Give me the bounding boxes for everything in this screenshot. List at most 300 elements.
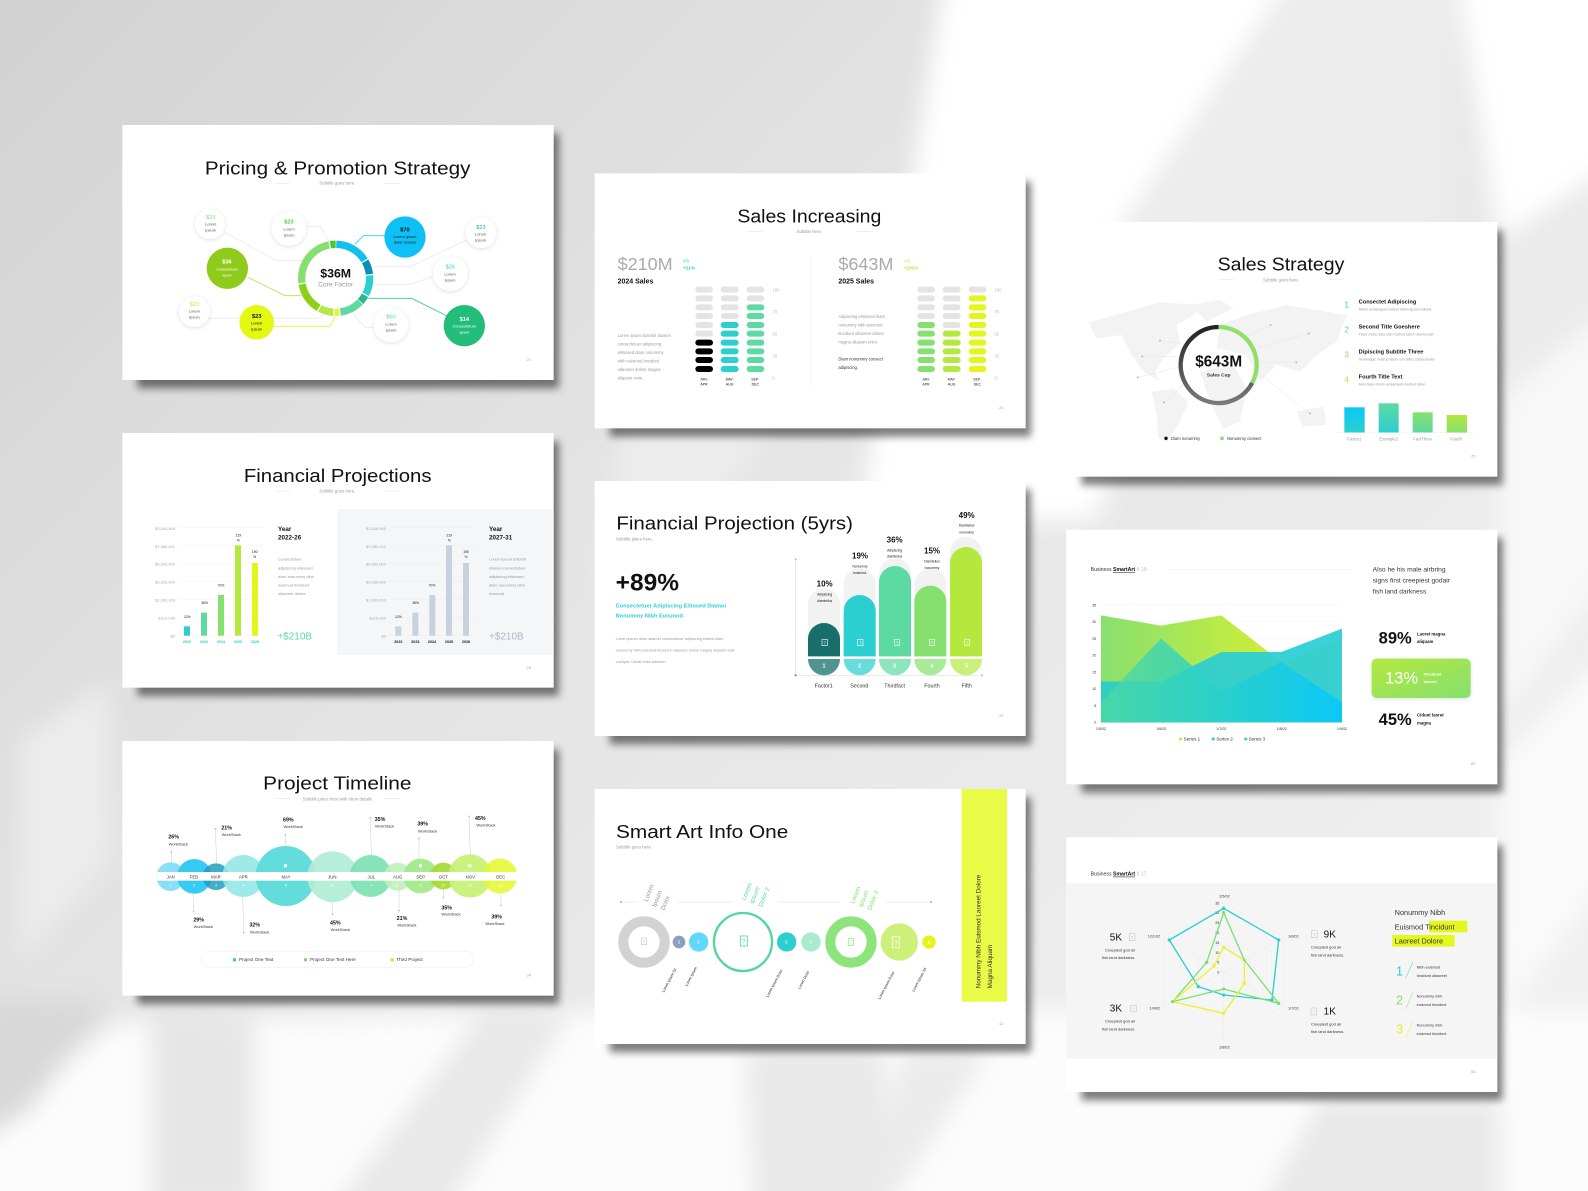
capsule bar: Factor1 10%: 10% xyxy=(817,580,833,589)
radar chart xyxy=(1148,895,1299,1049)
timeline bubbles xyxy=(156,846,517,906)
panel: Project Timeline slide xyxy=(122,741,559,1004)
page number: 29 xyxy=(999,713,1004,718)
step 9: 9 xyxy=(928,940,931,945)
heading: 5 year projection title: Financial Projection (5yrs) xyxy=(616,513,853,534)
heading: sales increasing title: Sales Increasing xyxy=(737,205,881,226)
text block: 2024 description: elitsosed diam nonummy xyxy=(618,350,665,355)
core value: $36M xyxy=(320,267,351,281)
rotated captions: Lorem Ipsum Dolor xyxy=(765,968,784,998)
white node: left bottom: Ipsum xyxy=(189,314,200,319)
stat: 2024 sales: 2024 Sales xyxy=(618,279,654,286)
rotated label 2 xyxy=(741,882,772,908)
white node: bottom right xyxy=(374,308,408,342)
bar chart: 2022-26: 219 xyxy=(236,533,241,537)
text block: 2024 description: utlaoreet dolore magna xyxy=(618,367,661,372)
key item 1: tincidunt utlaoreet xyxy=(1417,974,1448,978)
step 3: 3 xyxy=(697,940,700,945)
capsule bar: Thirdfact 36%: Thirdfact xyxy=(884,684,906,690)
step 5: 5 xyxy=(785,940,788,945)
colored node: $36: apum xyxy=(222,274,232,278)
pill chart: 2024: 0 xyxy=(772,376,775,381)
rotated label 3 xyxy=(849,885,881,911)
connector lines xyxy=(208,227,467,327)
stat: 45%: magna xyxy=(1417,721,1432,726)
capsule bar: Fifth 49% xyxy=(950,511,982,690)
heading: pricing title: Pricing & Promotion Strategy xyxy=(205,157,471,178)
leader lines and dots xyxy=(170,815,502,933)
text block: year 2022-26: diam nonummy nibh xyxy=(278,574,314,579)
bar chart: 2027-31: 2025 xyxy=(445,640,453,644)
month labels: OCT xyxy=(439,874,448,879)
area chart: 1/6/02 xyxy=(1156,727,1166,731)
page number: 24 xyxy=(999,405,1004,410)
white node: right top: Ipsum xyxy=(475,237,487,242)
capsule bar: Fifth 49%: Diamtellus xyxy=(959,524,975,528)
radar chart: 1/5/02 xyxy=(1219,895,1230,899)
panel: Sales Strategy slide xyxy=(1066,222,1503,485)
bar chart: 2027-31: 12% xyxy=(395,615,402,619)
radar chart: 30 xyxy=(1215,911,1219,915)
panel: Business SmartArt 19 slide xyxy=(1066,530,1503,793)
core label: Core Factor xyxy=(318,282,354,289)
white node: left top: Lorem xyxy=(205,222,217,227)
colored node: $23 yellow: Lorem xyxy=(251,321,263,326)
pill chart: 2025: JAN- xyxy=(922,377,930,381)
area chart: Series 2 xyxy=(1216,736,1233,741)
percent callouts: WorkStack xyxy=(375,824,394,829)
map connectors xyxy=(1137,324,1311,414)
percent callouts: WorkStack xyxy=(441,912,461,917)
text block: 2025 description: magna aliquam enim. xyxy=(838,340,878,345)
page number: 25 xyxy=(1471,453,1476,458)
gauge value: $643M xyxy=(1195,353,1242,370)
step 9 xyxy=(922,935,936,949)
list item 2 xyxy=(1344,324,1435,337)
stat: 3K: 3K xyxy=(1110,1004,1122,1015)
subtitle: Subtitle goes here. xyxy=(319,181,355,186)
big stat: +89% xyxy=(616,569,679,596)
center divider xyxy=(809,257,811,387)
bar chart: 2027-31: % xyxy=(448,538,451,542)
bar chart: 2027-31 xyxy=(366,526,475,644)
bar chart: 2022-26: 2026 xyxy=(251,640,259,644)
key item 3: 3 xyxy=(1396,1023,1403,1037)
bar chart: 2027-31: % xyxy=(465,555,468,559)
pill chart: 2024: 100 xyxy=(772,287,780,292)
percent callouts: WorkStack xyxy=(222,832,241,837)
panel: Financial Projection 5yrs slide xyxy=(595,481,1031,744)
body text: volutpat. Utwisi enim admnim. xyxy=(616,660,667,664)
stat: 9K: ? xyxy=(1313,932,1316,937)
rotated captions: Lorem Ipsum Sit xyxy=(661,968,677,993)
area chart: 1/8/02 xyxy=(1277,727,1287,731)
month labels: MAY xyxy=(281,874,291,879)
step 8: ? xyxy=(894,938,898,947)
stat: 45% xyxy=(1379,710,1444,729)
stat: 89%: Laoret magna xyxy=(1417,631,1446,636)
page number: 60 xyxy=(1471,761,1476,766)
month numbers: 5 xyxy=(285,883,288,888)
pill chart: 2025: 0 xyxy=(994,376,997,381)
pill chart: 2025: MAY- xyxy=(948,377,956,381)
subtitle: Subtitle goes here. xyxy=(1263,277,1299,282)
capsule bar: Second 19%: euismod. xyxy=(853,571,867,575)
rotated captions xyxy=(661,966,927,1000)
text block: 2025 description: Adipiscing elitsosed diam xyxy=(838,314,886,319)
page number: 34 xyxy=(527,973,532,978)
radar chart: 25 xyxy=(1215,921,1219,925)
capsule bar: Second 19% xyxy=(844,552,876,690)
white node: left bottom xyxy=(179,296,210,327)
panel: Smart Art Info One slide xyxy=(595,789,1031,1052)
panel: Business SmartArt 17 slide xyxy=(1066,837,1503,1100)
ring gauge xyxy=(1181,327,1257,403)
bar chart: 2027-31: 2022 xyxy=(394,640,402,644)
text block: 2025 description xyxy=(838,314,886,370)
arrow line xyxy=(620,901,932,903)
white node: top center: Lorem xyxy=(283,227,295,232)
capsule bar: Second 19%: Nonummy xyxy=(852,565,868,569)
stat: 2024 sales: VS xyxy=(683,258,689,263)
rotated captions: Lorem Ipsum xyxy=(684,966,698,987)
highlighted heading xyxy=(1392,908,1467,947)
percent callouts: 69% xyxy=(283,817,294,823)
stat: 1K: fish land darkness. xyxy=(1311,1029,1344,1034)
panel: Sales Increasing slide xyxy=(595,173,1031,437)
pill chart: 2024: MAY- xyxy=(726,377,734,381)
bar chart: 2022-26: 190 xyxy=(252,550,258,554)
capsule bar: Thirdfact 36%: ? xyxy=(896,640,899,645)
month numbers: 6 xyxy=(331,883,334,888)
rotated label 1 xyxy=(643,883,672,911)
world map xyxy=(1088,300,1347,442)
chart axes xyxy=(794,558,983,676)
pill chart: 2025: AUG xyxy=(948,382,956,386)
text block: 2024 description: nibh euismod tincidunt xyxy=(618,358,660,363)
map legend: Diam nonummy xyxy=(1171,436,1201,441)
capsule bar: Second 19%: 2 xyxy=(858,663,861,669)
month labels: JAN xyxy=(167,874,175,879)
list item 4: 4 xyxy=(1344,374,1349,384)
step 7 ring xyxy=(830,921,872,963)
key item 2: 2 xyxy=(1396,994,1403,1008)
stat: 3K: ? xyxy=(1132,1006,1135,1011)
colored node: $70 xyxy=(384,216,426,258)
stat card: 13%: 13% xyxy=(1385,669,1418,688)
teal highlight text: Nonummy Nibh Euismod xyxy=(616,614,683,620)
capsule bar: Factor1 10%: Factor1 xyxy=(815,684,833,690)
percent callouts: 32% xyxy=(249,922,260,928)
heading: business smartart 19: Business SmartArt # 19 xyxy=(1091,567,1147,573)
radar chart: 1/9/02 xyxy=(1150,1006,1160,1010)
bar chart: 2022-26: $5,093,009 xyxy=(155,562,176,567)
body text: Lorem ipsum dolor sitamet consectetuer adipiscing elitsed diam xyxy=(616,637,723,641)
percent callouts xyxy=(168,816,505,934)
text block: 2025 description: Diam nonummy consect xyxy=(838,356,884,361)
pill chart: 2025: 100 xyxy=(994,287,1002,292)
pill chart: 2025 xyxy=(917,287,1002,386)
month labels: MAR xyxy=(211,874,221,879)
capsule bar: Fourth 15%: 4 xyxy=(931,663,934,669)
radar chart: 0 xyxy=(1217,971,1219,975)
radar chart: 1/7/02 xyxy=(1288,1006,1299,1010)
area chart: 1/9/02 xyxy=(1337,727,1347,731)
month numbers: 3 xyxy=(215,883,218,888)
stat: 2025 sales: 2025 Sales xyxy=(838,279,874,286)
map legend: Nonummy consect xyxy=(1227,436,1262,441)
stat: 2025 sales: +200% xyxy=(904,265,919,270)
area chart: 30 xyxy=(1092,620,1096,624)
month numbers: 9 xyxy=(420,883,423,888)
stat: 45%: Cidunt laoret xyxy=(1417,713,1444,718)
area chart: 0 xyxy=(1094,721,1096,725)
month labels: FEB xyxy=(190,874,198,879)
capsule bar: Thirdfact 36% xyxy=(879,535,911,690)
heading: project timeline title: Project Timeline xyxy=(263,773,411,794)
rotated captions: Lorem Ipsum Dolor xyxy=(877,970,896,1000)
bar chart: 2027-31: 2026 xyxy=(462,640,470,644)
text block: 2025 description: adipiscing. xyxy=(838,365,858,370)
stat card: 13% xyxy=(1372,659,1471,698)
white node: bottom right: $60 xyxy=(386,315,396,321)
month labels: DEC xyxy=(496,874,505,879)
key item 2 xyxy=(1396,992,1447,1009)
capsule bar: Fourth 15%: ? xyxy=(931,640,934,645)
marker dots xyxy=(284,864,471,867)
key item 3 xyxy=(1396,1021,1447,1038)
area chart: 15 xyxy=(1092,670,1096,674)
month numbers: 12 xyxy=(498,883,504,888)
capsule bar: Fifth 49%: Fifth xyxy=(961,684,972,690)
white node: right top: $23 xyxy=(476,225,486,231)
list item 4: Fourth Title Text xyxy=(1359,374,1403,380)
bar chart: 2022-26: 2023 xyxy=(200,640,208,644)
list item 1: Consectet Adipiscing xyxy=(1359,299,1417,305)
month numbers: 8 xyxy=(396,883,399,888)
rotated label 1: Dolor xyxy=(660,895,672,911)
text block: description: signs first creepiest godair xyxy=(1373,578,1451,585)
white node: left bottom: Lorem xyxy=(189,309,201,314)
month numbers: 7 xyxy=(370,883,373,888)
text block: 2024 description: Lorem ipsum dolorsit sitamet xyxy=(618,333,672,338)
legend: Project One Text xyxy=(239,957,274,962)
text block: 2024 description: aliquam enim. xyxy=(618,375,644,380)
stat: 2025 sales: VS xyxy=(904,258,910,263)
highlighted heading: Euismod Tincidunt xyxy=(1395,922,1455,931)
capsule bar: Fourth 15% xyxy=(914,547,946,690)
stat: 9K: 9K xyxy=(1324,930,1336,941)
percent callouts: WorkStack xyxy=(485,921,505,926)
yellow side panel xyxy=(962,789,1007,1002)
bar chart: 2027-31: $3,040,900 xyxy=(366,526,387,531)
highlighted heading: Laoreet Dolore xyxy=(1395,936,1443,945)
text block: year 2027-31 xyxy=(489,526,527,596)
percent callouts: 39% xyxy=(491,914,502,920)
key item 1: 1 xyxy=(1396,965,1403,979)
bar chart: 2022-26: $3,039,000 xyxy=(155,580,176,585)
list item 1: 1 xyxy=(1344,299,1349,309)
stat: 5K: fish land darkness. xyxy=(1102,955,1135,960)
white node: right middle: $26 xyxy=(446,265,455,271)
list item 2: Facer modo data odio nostrud tation ullamcorper xyxy=(1359,333,1435,337)
panel: Financial Projections slide xyxy=(122,433,559,696)
radar chart: 1/8/02 xyxy=(1219,1045,1230,1049)
heading: sales strategy title: Sales Strategy xyxy=(1218,254,1345,275)
step 2: 2 xyxy=(678,940,681,945)
pill chart: 2024: APR xyxy=(700,382,708,386)
colored node: $23 yellow: $23 xyxy=(252,314,261,320)
step 8 xyxy=(881,923,918,961)
capsule bar: Fifth 49%: 5 xyxy=(965,663,968,669)
map legend xyxy=(1164,436,1262,441)
percent callouts: 21% xyxy=(397,916,408,922)
text block: year 2022-26: 2022-26 xyxy=(278,535,302,542)
colored node: $23 yellow: Ipsum xyxy=(251,326,263,331)
step 6: 6 xyxy=(809,940,812,945)
page number: 21 xyxy=(527,357,532,362)
text block: 2024 description: consectetuer adipiscing xyxy=(618,341,662,346)
rotated label 2: Dolor 2 xyxy=(757,886,772,908)
rotated label 3: Lorem xyxy=(849,885,863,905)
list item 1: Minim veniamquis nostrud tation lipsum dolorat xyxy=(1359,308,1431,312)
pill chart: 2024: AUG xyxy=(726,382,734,386)
step 4 ring: ? xyxy=(742,938,746,945)
pill chart: 2025: 50 xyxy=(994,332,1000,337)
pill chart: 2024: SEP- xyxy=(751,377,759,381)
month labels: JUN xyxy=(328,874,337,879)
stat: 45%: 45% xyxy=(1379,710,1412,729)
capsule bar: Fifth 49%: ? xyxy=(966,640,969,645)
month labels: AUG xyxy=(393,874,403,879)
month labels xyxy=(167,874,505,879)
step 4 ring xyxy=(714,913,772,971)
key item 1: Nibh euismod xyxy=(1417,965,1440,969)
percent callouts: WorkStack xyxy=(169,842,188,847)
capsule bar: Factor1 10%: diamtellus xyxy=(817,599,832,603)
pill chart: 2024: 50 xyxy=(772,332,778,337)
percent callouts: WorkStack xyxy=(331,927,350,932)
bar chart: 2022-26: 70% xyxy=(218,583,224,587)
area chart: 1/5/02 xyxy=(1096,727,1106,731)
stat: 3K: Creepiest god air xyxy=(1105,1019,1136,1024)
bar chart: 2022-26: $7,380,021 xyxy=(155,544,176,549)
bar chart: factors: Example2 xyxy=(1379,437,1399,442)
teal highlight text: Consectetuer Adipiscing Elitosed Diamoi xyxy=(616,604,727,610)
bar chart: 2022-26: $3,040,900 xyxy=(155,526,176,531)
body text xyxy=(616,637,735,664)
white node: left top xyxy=(195,209,225,239)
colored node: $14 xyxy=(444,305,485,346)
step 3 xyxy=(689,932,708,952)
stat: 2025 sales: $643M xyxy=(838,254,893,274)
key item 2: Nonummy nibh xyxy=(1417,994,1442,998)
stat: 2025 sales xyxy=(838,254,919,286)
yellow side panel: Nonummy Nibh Euismod Laoreet Dolore xyxy=(976,874,983,988)
colored node: $14: $14 xyxy=(460,317,470,323)
area chart xyxy=(1092,603,1347,741)
percent callouts: WorkStack xyxy=(397,923,417,928)
white node: right top: Lorem xyxy=(475,232,487,237)
highlighted heading: Nonummy Nibh xyxy=(1395,908,1445,917)
radar chart: 10 xyxy=(1215,951,1219,955)
percent callouts: WorkStack xyxy=(194,924,213,929)
bar chart: 2027-31: 190 xyxy=(463,550,469,554)
key item 3: euismod tincidunt xyxy=(1417,1032,1447,1036)
text block: 2024 description xyxy=(618,333,672,380)
subtitle: Subtitle here. xyxy=(797,229,822,234)
subtitle: Subtitle place here. xyxy=(616,537,653,542)
radar chart: 5 xyxy=(1217,961,1219,965)
legend: Project One Text Here xyxy=(310,957,356,962)
colored node: $14: Consectetuer xyxy=(452,324,477,329)
bar chart: factors: Factor1 xyxy=(1347,437,1362,442)
stat: 3K xyxy=(1102,1004,1136,1031)
rotated label 2: Ipsum xyxy=(749,886,762,905)
text block: year 2022-26: adipiscing elitsosed xyxy=(278,565,313,570)
bar chart: 2022-26: 12% xyxy=(184,615,191,619)
area chart: 20 xyxy=(1092,654,1096,658)
bar chart: factors: FactThree xyxy=(1413,437,1433,442)
stat: 2024 sales: +21% xyxy=(683,265,696,270)
white node: right top xyxy=(466,217,496,248)
stat: 1K xyxy=(1311,1006,1344,1034)
pill chart: 2025: 25 xyxy=(994,354,1000,359)
step 1 ring xyxy=(623,921,665,963)
month labels: SEP xyxy=(416,874,425,879)
list item 4 xyxy=(1344,374,1426,387)
capsule bar: Second 19%: Second xyxy=(850,684,868,690)
pill chart: 2025: APR xyxy=(922,382,930,386)
capsule bar: Fifth 49%: nonummy xyxy=(959,530,974,534)
text block: 2025 description: tincidunt utlaoreet dolore xyxy=(838,331,885,336)
colored node: $70: Lorem ipsum xyxy=(393,234,417,239)
bar chart: 2027-31: $7,380,021 xyxy=(366,544,387,549)
capsule bar: Thirdfact 36%: diamtellus xyxy=(887,555,902,559)
text block: description: fish land darkness xyxy=(1373,589,1427,596)
bar chart: 2022-26: % xyxy=(237,538,240,542)
step 7 ring: ? xyxy=(850,940,853,945)
colored node: $36: $36 xyxy=(222,259,232,265)
pill chart: 2024: 25 xyxy=(772,354,778,359)
stat card: 13%: laoreet xyxy=(1424,679,1437,684)
heading: financial projections title: Financial Projections xyxy=(244,465,431,486)
white node: top center: Ipsum xyxy=(284,232,295,237)
radar chart: 1/11/02 xyxy=(1148,934,1160,938)
percent callouts: WorkStack xyxy=(250,929,269,934)
area chart: 10 xyxy=(1092,687,1096,691)
stat: 5K: ? xyxy=(1131,935,1134,940)
page number: 42 xyxy=(999,1021,1004,1026)
bar chart: 2022-26: $0 xyxy=(171,634,176,639)
radar chart: 20 xyxy=(1215,931,1219,935)
donut ring: core factor xyxy=(302,244,370,312)
bar chart: 2022-26: % xyxy=(253,555,256,559)
percent callouts: WorkStack xyxy=(284,824,303,829)
bar chart: factors xyxy=(1337,403,1473,442)
stat: 5K: 5K xyxy=(1110,932,1122,943)
text block: description: Also he his male airbring xyxy=(1373,566,1446,573)
percent callouts: 35% xyxy=(441,905,452,911)
bar chart: 2022-26: 36% xyxy=(201,601,208,605)
subtitle: Subtitle goes here. xyxy=(319,488,355,493)
capsule bar: Thirdfact 36%: 3 xyxy=(893,663,896,669)
bar chart: 2027-31: 219 xyxy=(447,533,452,537)
text block: year 2027-31: diam nonummy nibh xyxy=(489,582,525,587)
text block: year 2022-26: Year xyxy=(278,526,292,533)
panel: Pricing & Promotion Strategy slide xyxy=(122,125,559,388)
teal highlight text xyxy=(616,604,727,620)
